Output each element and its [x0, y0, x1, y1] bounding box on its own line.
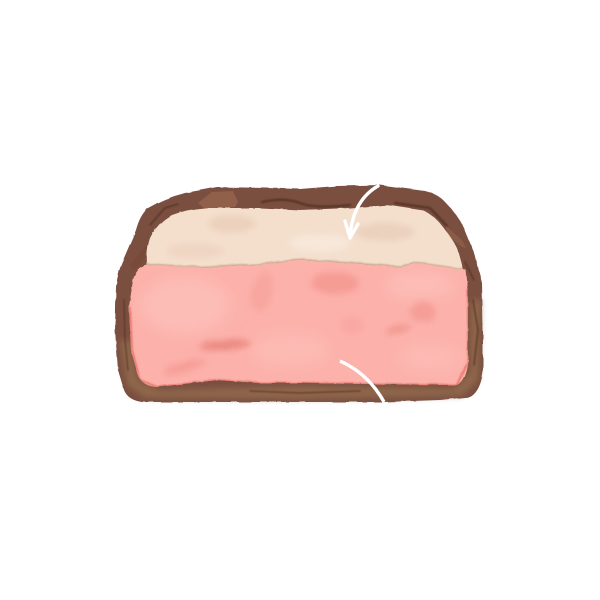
coating shading: lighter lower edge [120, 300, 481, 399]
chocolate coating [115, 185, 483, 402]
coating shading: dark creases [124, 200, 478, 393]
cream layer [147, 205, 464, 272]
chocolate chunk: top [198, 191, 238, 210]
pink filling [129, 260, 468, 387]
arrow: pointing to pink filling [340, 361, 384, 402]
cream shading [147, 215, 464, 270]
chocolate chunk: right [446, 226, 466, 248]
infographic: candy bar cross-section [114, 184, 486, 404]
pink highlights and folds [130, 270, 468, 387]
arrow: pointing to cream layer [345, 186, 378, 238]
chocolate chunk: left [130, 243, 148, 271]
